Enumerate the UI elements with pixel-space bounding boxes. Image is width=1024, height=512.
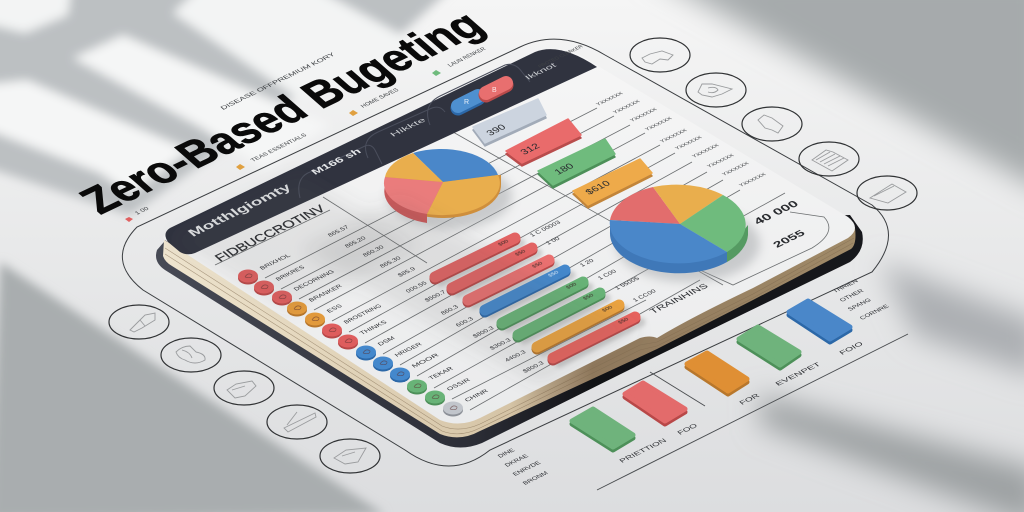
right-side row labels: YXXXXXX xyxy=(659,128,689,144)
row values: $800.3 xyxy=(472,325,496,339)
row labels: MOOR xyxy=(411,352,441,369)
right-side row labels xyxy=(537,44,768,188)
horizontal bar chart xyxy=(435,238,641,363)
notebook cover xyxy=(156,215,863,448)
legend items: HOME SAVES xyxy=(360,87,400,109)
row labels: THINKS xyxy=(359,320,389,336)
bottom labels: SPANG xyxy=(847,297,873,312)
row labels: BRIXHOL xyxy=(259,253,293,271)
row values: 4400.3 xyxy=(504,349,528,363)
bottom labels: FOO xyxy=(675,422,700,436)
row values: 1 C 00003 xyxy=(529,220,563,238)
row values: $500.7 xyxy=(424,289,448,303)
left pie chart xyxy=(384,149,512,229)
notebook xyxy=(156,49,863,447)
bar values: $00 xyxy=(565,282,578,290)
row values: $85.9 xyxy=(397,266,417,278)
row labels: BRANKER xyxy=(308,283,344,303)
bar shadows xyxy=(441,243,641,363)
table grid lines xyxy=(215,108,829,410)
bottom labels: FOIO xyxy=(837,340,865,356)
row values: 1 55005 xyxy=(614,276,641,291)
bar values: $50 xyxy=(547,270,560,278)
icons: left column xyxy=(109,305,380,473)
row values: 1 00 xyxy=(545,236,562,246)
bottom labels: CORNRE xyxy=(859,304,891,321)
header bar: Ikknot xyxy=(523,61,559,81)
page edge lines xyxy=(165,238,854,434)
right pie chart xyxy=(610,185,760,282)
bottom labels: BRONM xyxy=(522,471,550,486)
row values: 1 C00 xyxy=(597,269,619,281)
tab outlines xyxy=(299,64,530,198)
bar values: $50 xyxy=(514,249,527,257)
right-side row labels: YXXXXXX xyxy=(629,107,659,123)
header bar: Hikkte xyxy=(388,116,428,138)
toggle buttons xyxy=(458,98,478,108)
bar values: $00 xyxy=(497,239,510,247)
header bar xyxy=(165,49,597,254)
legend items: DISEASE OFFPREMIUM KORY xyxy=(220,52,337,111)
row labels: ESS xyxy=(326,303,344,314)
bottom labels: FOR xyxy=(737,392,761,406)
totals: TRAINHINS xyxy=(648,282,710,315)
header tab labels: Motthlgiomty xyxy=(185,181,294,239)
row values: 000.55 xyxy=(405,280,429,294)
row values: 1 CC00 xyxy=(632,288,658,303)
row values: 1 20 xyxy=(579,258,596,268)
totals: 40 000 xyxy=(751,198,802,227)
page shading xyxy=(170,175,640,385)
section heading: FIDBUCCROTINV xyxy=(212,203,329,264)
value tags: $610 xyxy=(584,179,613,197)
bar values: $50 xyxy=(531,261,544,269)
row values: $800.3 xyxy=(522,360,546,374)
row values: $300.3 xyxy=(489,337,513,351)
bar values: $50 xyxy=(582,293,595,301)
bars xyxy=(435,238,635,360)
header bar: M166 sh xyxy=(310,147,364,177)
right-side row labels: YXXXXXX xyxy=(721,161,751,177)
header bar: B xyxy=(492,87,497,94)
row labels: CHINR xyxy=(464,388,490,403)
title: Zero-Based Bugeting xyxy=(70,4,495,222)
right-side row labels: YXXXXXX xyxy=(674,135,704,151)
bottom category blocks xyxy=(572,301,850,450)
row values: 860.3 xyxy=(440,304,460,316)
bottom labels: THRIEN xyxy=(832,278,860,294)
totals xyxy=(648,198,808,315)
row values: 865.57 xyxy=(327,224,351,238)
right-side row labels: PROTEG CLERKER xyxy=(537,44,585,69)
bar values: $00 xyxy=(601,305,614,313)
notebook page stack xyxy=(163,228,856,437)
row labels: DSM xyxy=(377,336,397,347)
row labels: HRIGER xyxy=(394,342,424,358)
row values xyxy=(327,220,658,374)
row values: 865.20 xyxy=(344,235,368,249)
row labels: TEKAR xyxy=(428,366,455,381)
row labels: BROSTRING xyxy=(343,303,383,325)
right-side row labels: YXXXXXX xyxy=(738,172,768,188)
value tags: 390 xyxy=(485,123,509,138)
right-side row labels: YXXXXXX xyxy=(595,91,625,107)
icons: right column xyxy=(630,38,917,210)
right-side row labels: YXXXXXX xyxy=(706,153,736,169)
row labels: OSSIR xyxy=(446,377,472,392)
legend items: 1 00 xyxy=(134,206,151,216)
bottom labels: DINE xyxy=(497,448,516,459)
value tags: 180 xyxy=(553,162,577,177)
right-side row labels: YXXXXXX xyxy=(691,143,721,159)
row labels: DECORNING xyxy=(293,269,336,292)
outer rounded outline xyxy=(122,39,888,466)
legend items: LAUN RENKER xyxy=(447,46,488,68)
bottom labels: PRIETTION xyxy=(617,437,668,464)
row labels xyxy=(259,253,490,403)
right-side row labels: YXXXXXX xyxy=(612,99,642,115)
bottom labels xyxy=(497,278,891,486)
row values: 865.30 xyxy=(379,255,403,269)
legend items xyxy=(125,46,488,222)
bar values xyxy=(497,239,630,325)
page surface xyxy=(163,49,855,424)
totals: 2055 xyxy=(771,229,808,250)
right-side row labels: YXXXXXX xyxy=(644,116,674,132)
bottom axis xyxy=(597,334,908,490)
bottom labels: DKRAE xyxy=(504,453,530,468)
legend items: TEAS ESSENTIALS xyxy=(250,133,308,163)
row labels: BRIKRES xyxy=(275,265,306,282)
header bar: R xyxy=(464,99,469,106)
value tags: 312 xyxy=(519,142,543,157)
bottom labels: EVENPET xyxy=(773,360,823,387)
row values: 600.3 xyxy=(455,316,475,328)
status dots xyxy=(238,270,463,416)
bar values: $50 xyxy=(617,317,630,325)
bottom labels: OTHER xyxy=(839,288,866,303)
row values: 860.30 xyxy=(362,244,386,258)
bottom labels: ENRVDE xyxy=(512,460,542,477)
value tags xyxy=(473,99,652,208)
